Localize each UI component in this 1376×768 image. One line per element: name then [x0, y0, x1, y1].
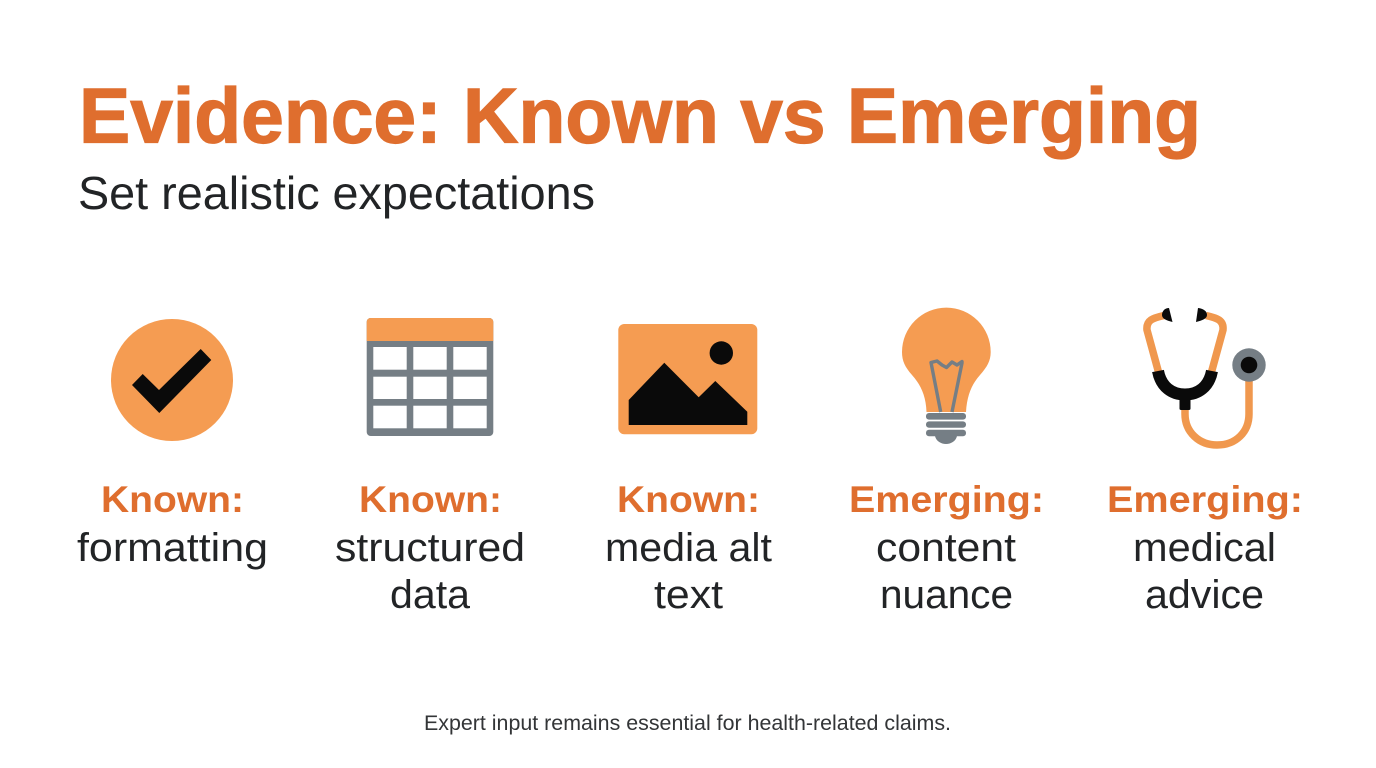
label: emerging content nuance: Emerging:: [849, 479, 1044, 520]
label: known structured data: Known:: [359, 479, 502, 520]
footer note: Expert input remains essential for health-related claims.: [424, 712, 951, 735]
label: known structured data: [335, 479, 525, 617]
title: Evidence: Known vs Emerging: [79, 72, 1201, 160]
label: known formatting: Known:: [101, 479, 244, 520]
column: known structured data: [335, 318, 525, 617]
label: emerging medical advice: [1107, 479, 1303, 617]
label: known formatting: formatting: [77, 526, 268, 570]
column: emerging content nuance: [849, 308, 1044, 617]
label: emerging medical advice: Emerging:: [1107, 479, 1303, 520]
label: emerging content nuance: [849, 479, 1044, 617]
label: emerging medical advice: advice: [1145, 573, 1264, 617]
label: known media alt text: text: [654, 573, 723, 617]
icon: table: [367, 318, 493, 436]
label: emerging content nuance: nuance: [880, 573, 1013, 617]
column: emerging medical advice: [1107, 308, 1303, 617]
label: known media alt text: [605, 479, 772, 617]
icon: check mark: [111, 319, 233, 441]
label: known structured data: structured: [335, 526, 525, 570]
column: known media alt text: [605, 324, 772, 617]
subtitle: Set realistic expectations: [78, 167, 595, 219]
label: known formatting: [77, 479, 268, 570]
label: emerging medical advice: medical: [1133, 526, 1276, 570]
column: known formatting: [77, 319, 268, 570]
icon: stethoscope: [1147, 308, 1266, 445]
icon: light bulb: [902, 308, 991, 444]
label: known media alt text: Known:: [617, 479, 760, 520]
label: emerging content nuance: content: [876, 526, 1016, 570]
label: known media alt text: media alt: [605, 526, 772, 570]
icon: image: [618, 324, 757, 434]
label: known structured data: data: [390, 573, 471, 617]
